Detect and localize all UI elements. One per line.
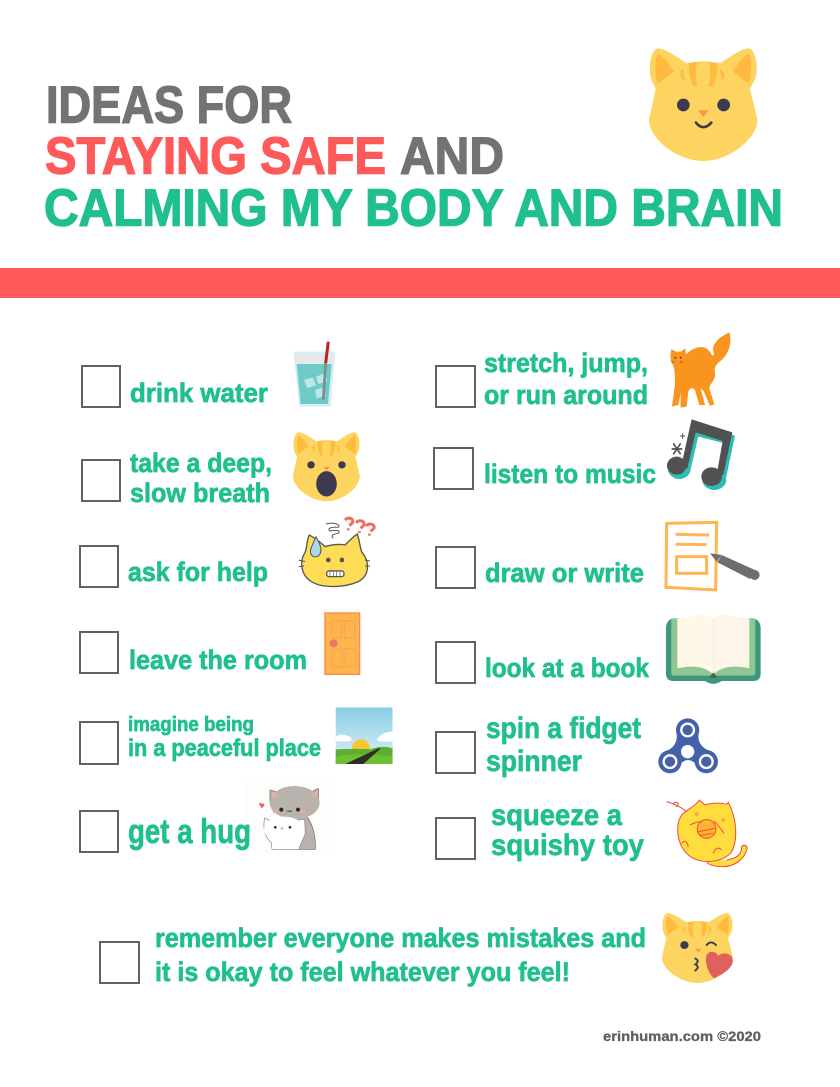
icon: yellow round cat with yarn bbox=[667, 800, 747, 867]
icon: kissing cat with heart bbox=[662, 913, 733, 983]
icon: paper and pencil bbox=[666, 522, 760, 590]
item: drink water bbox=[82, 342, 335, 408]
item: stretch, jump, or run around: or run around bbox=[484, 380, 648, 410]
icon: arched orange cat bbox=[670, 332, 730, 408]
item: leave the room bbox=[80, 613, 360, 675]
title: AND bbox=[400, 128, 504, 186]
icon: smiling cat bbox=[649, 48, 757, 161]
item: get a hug bbox=[80, 778, 337, 853]
icon: surprised cat bbox=[293, 432, 360, 501]
item: spin a fidget spinner: spinner bbox=[486, 745, 582, 778]
item: take a deep, slow breath: slow breath bbox=[130, 478, 270, 508]
item: stretch, jump, or run around bbox=[436, 332, 730, 410]
item: take a deep, slow breath: take a deep, bbox=[130, 448, 272, 478]
item: leave the room: leave the room bbox=[129, 645, 307, 675]
item: spin a fidget spinner: spin a fidget bbox=[486, 712, 641, 745]
icon: music notes bbox=[667, 419, 735, 490]
item: squeeze a squishy toy bbox=[436, 799, 747, 867]
item: draw or write: draw or write bbox=[485, 558, 644, 588]
item: squeeze a squishy toy: squishy toy bbox=[491, 829, 644, 862]
item: listen to music: listen to music bbox=[484, 459, 656, 489]
icon: open book bbox=[666, 615, 761, 684]
item: imagine being in a peaceful place: imagine being bbox=[128, 714, 254, 736]
item: ask for help bbox=[80, 518, 374, 587]
item: imagine being in a peaceful place: in a peaceful place bbox=[128, 735, 321, 762]
item: ask for help: ask for help bbox=[128, 557, 268, 587]
icon: fidget spinner bbox=[658, 718, 718, 773]
icon: worried cat with question marks bbox=[299, 518, 374, 587]
title: IDEAS FOR bbox=[46, 76, 292, 134]
item: squeeze a squishy toy: squeeze a bbox=[491, 799, 622, 832]
icon: glass of water bbox=[293, 342, 335, 407]
item: remember everyone makes mistakes: it is okay to feel whatever you feel! bbox=[155, 957, 570, 987]
item: stretch, jump, or run around: stretch, jump, bbox=[484, 348, 648, 378]
item: remember everyone makes mistakes: remember everyone makes mistakes and bbox=[155, 923, 646, 953]
item: imagine being in a peaceful place bbox=[80, 707, 393, 764]
title: CALMING MY BODY AND BRAIN bbox=[44, 180, 783, 238]
title: STAYING SAFE bbox=[45, 128, 386, 186]
icon: door bbox=[325, 613, 360, 674]
red divider band bbox=[0, 268, 840, 298]
item: listen to music bbox=[434, 419, 735, 490]
item: draw or write bbox=[436, 522, 760, 590]
footer credit: erinhuman.com ©2020 bbox=[603, 1028, 761, 1044]
item: drink water: drink water bbox=[130, 378, 268, 408]
item: take a deep, slow breath bbox=[82, 432, 360, 508]
item: get a hug: get a hug bbox=[128, 813, 251, 851]
item: remember everyone makes mistakes bbox=[100, 913, 733, 987]
title bbox=[44, 76, 783, 238]
item: spin a fidget spinner bbox=[436, 712, 718, 778]
icon: hugging cats bbox=[242, 778, 337, 853]
item: look at a book: look at a book bbox=[485, 653, 650, 683]
item: look at a book bbox=[436, 615, 761, 684]
icon: landscape bbox=[336, 707, 393, 764]
